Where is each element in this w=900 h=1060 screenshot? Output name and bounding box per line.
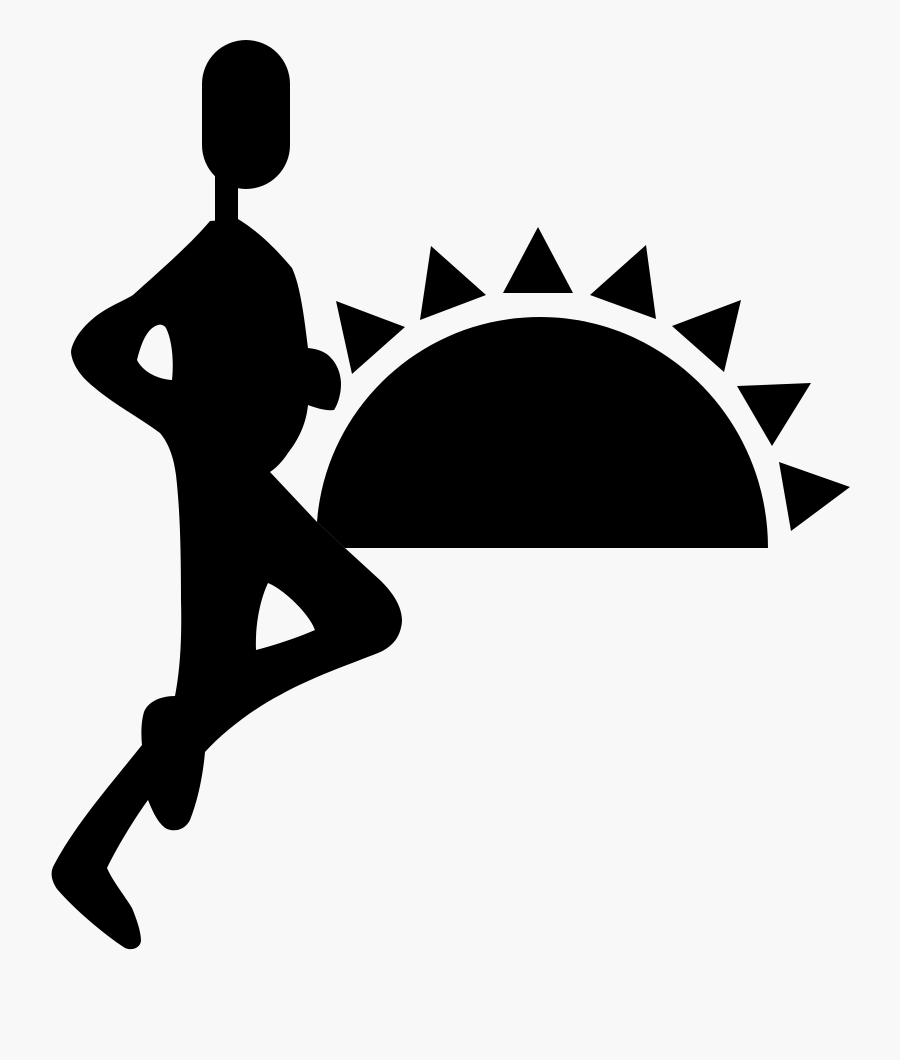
sun ray 3 bbox=[503, 227, 573, 293]
sun ray 1 bbox=[336, 301, 405, 374]
person head bbox=[202, 40, 290, 189]
icon: person silhouette bbox=[52, 40, 402, 949]
person neck bbox=[215, 175, 238, 225]
person body and legs bbox=[52, 219, 402, 949]
sun disc bbox=[317, 317, 768, 548]
sun ray 4 bbox=[590, 245, 656, 319]
sun ray 2 bbox=[420, 246, 486, 320]
icon: half sun bbox=[317, 227, 850, 548]
sun ray 6 bbox=[737, 383, 811, 446]
sun ray 5 bbox=[672, 300, 741, 372]
sun ray 7 bbox=[779, 462, 850, 531]
